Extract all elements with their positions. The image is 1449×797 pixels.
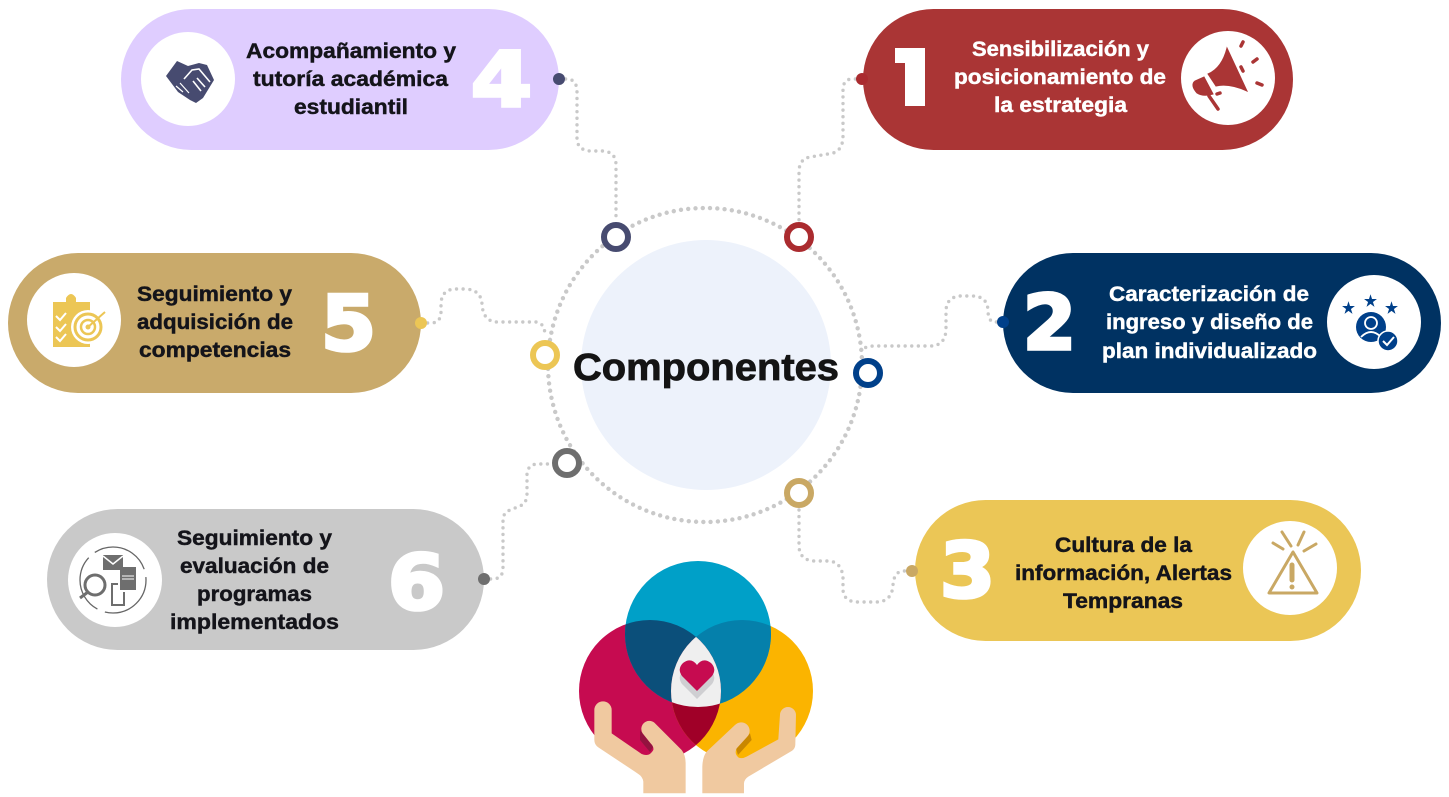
connector 4 — [559, 79, 616, 222]
central dotted ring — [548, 208, 862, 522]
connector 3 — [799, 510, 912, 602]
heading: ingreso y diseño de — [1106, 311, 1313, 334]
heading: Seguimiento y — [177, 527, 332, 550]
heading: competencias — [139, 339, 291, 362]
icon: clipboard and target — [53, 294, 105, 347]
number 2: 2 — [1023, 278, 1076, 367]
ring marker 1 — [787, 225, 811, 249]
number 1: 1 — [885, 30, 941, 133]
panel: component 6 — [47, 509, 490, 650]
panel: component 5 — [8, 253, 427, 393]
heading: la estrategia — [994, 94, 1127, 117]
logo: venn diagram with heart and hands — [579, 561, 813, 793]
number 5: 5 — [321, 279, 376, 368]
number 4: 4 — [471, 35, 532, 124]
connector 2 — [861, 296, 1003, 350]
connector 5 — [421, 289, 545, 336]
heading — [954, 38, 1166, 117]
icon: heart — [680, 660, 714, 699]
heading: Seguimiento y — [137, 283, 292, 306]
icon: warning triangle — [1269, 532, 1317, 593]
heading — [170, 527, 339, 634]
panel: component 2 — [997, 253, 1441, 393]
panel: component 3 — [906, 500, 1361, 641]
ring marker 2 — [856, 361, 880, 385]
connector 1 — [799, 79, 862, 222]
heading: programas — [197, 583, 312, 606]
ring marker 5 — [533, 343, 557, 367]
central light circle — [581, 240, 831, 490]
heading — [246, 40, 456, 119]
heading: Sensibilización y — [972, 38, 1149, 61]
ring marker 4 — [604, 225, 628, 249]
connector 6 — [484, 464, 552, 579]
heading: Caracterización de — [1109, 283, 1309, 306]
icon: handshake — [166, 61, 214, 103]
heading: posicionamiento de — [954, 66, 1166, 89]
title: Componentes: Componentes — [573, 347, 839, 389]
panel: component 4 — [121, 9, 565, 150]
icon: person with stars: ★ — [1385, 300, 1399, 317]
ring marker 3 — [787, 481, 811, 505]
number 3: 3 — [940, 526, 995, 615]
heading: tutoría académica — [253, 68, 448, 91]
heading: evaluación de — [180, 555, 329, 578]
heading: implementados — [170, 611, 339, 634]
number 6: 6 — [388, 538, 445, 627]
icon: person with stars: ★ — [1364, 293, 1378, 310]
heading: Cultura de la — [1055, 534, 1192, 557]
icon: person with stars: ★ — [1342, 300, 1356, 317]
heading — [137, 283, 293, 362]
heading — [1015, 534, 1232, 613]
icon: person with stars — [1342, 293, 1399, 351]
ring marker 6 — [555, 451, 579, 475]
heading: plan individualizado — [1102, 340, 1317, 363]
icon: megaphone — [1193, 42, 1262, 109]
heading: Tempranas — [1063, 590, 1183, 613]
panel: component 1 — [856, 9, 1293, 150]
heading: Acompañamiento y — [246, 40, 456, 63]
heading: estudiantil — [294, 96, 408, 119]
icon: hands — [594, 701, 796, 793]
icon: devices and magnifier — [80, 547, 146, 613]
heading — [1102, 283, 1317, 363]
heading: adquisición de — [137, 311, 293, 334]
heading: información, Alertas — [1015, 562, 1232, 585]
